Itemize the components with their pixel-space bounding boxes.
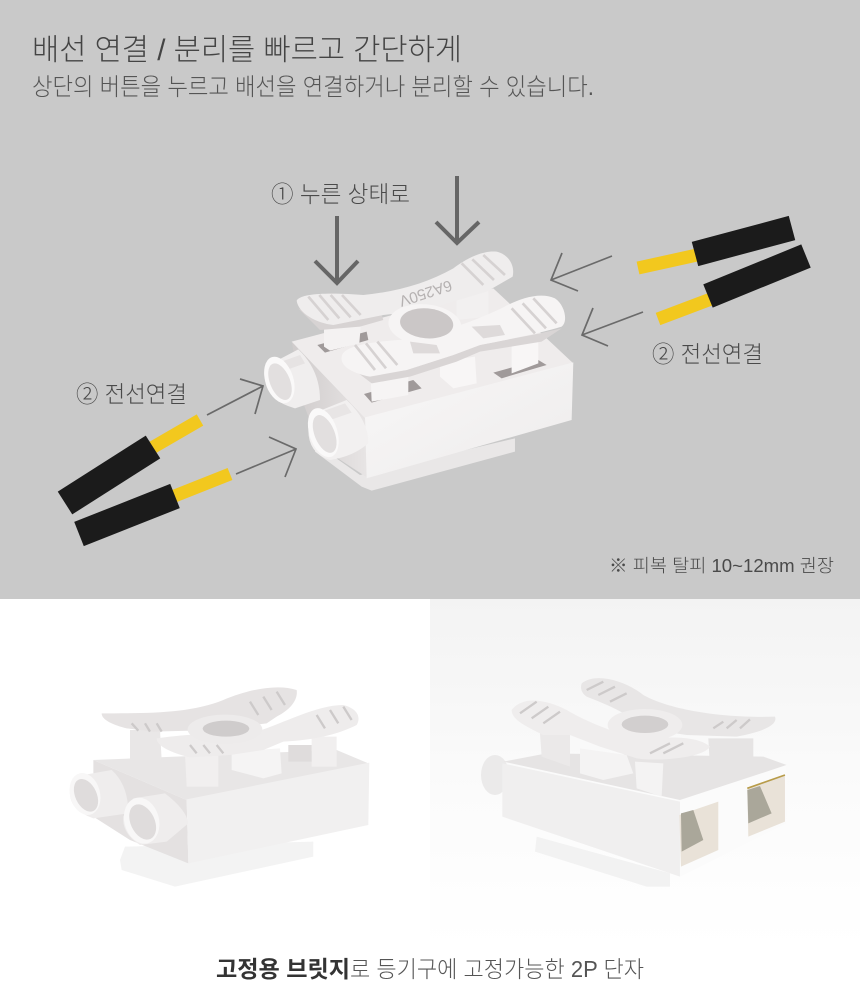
ribs	[132, 692, 352, 753]
front button underside	[343, 328, 562, 383]
front button bar	[157, 705, 359, 757]
photo: connector on grey, pressed state	[259, 251, 573, 491]
terminal opening right	[747, 775, 785, 837]
back button underside	[298, 308, 383, 330]
tube lower	[302, 400, 368, 461]
tube stub	[481, 755, 509, 795]
arrow: press down left	[315, 216, 358, 283]
front face	[365, 362, 573, 478]
wire: right lower	[658, 256, 806, 319]
bottom bridge	[315, 438, 515, 491]
tube lower	[119, 793, 188, 848]
front face	[502, 763, 680, 877]
arrow: right lower wire direction	[582, 308, 643, 346]
left side	[292, 342, 368, 478]
ribs	[308, 255, 557, 370]
wire: right upper	[638, 228, 792, 268]
photo: connector front-left view	[65, 687, 369, 887]
top face	[503, 753, 787, 800]
center ring	[387, 301, 463, 349]
arrow: right upper wire direction	[551, 253, 612, 291]
title: 배선 연결 / 분리를 빠르고 간단하게	[32, 34, 462, 67]
center ring	[608, 709, 682, 741]
embossed rating text: 6A250V	[396, 276, 454, 309]
bottom bridge	[120, 842, 313, 887]
panel: light bottom-right photo	[430, 599, 860, 949]
terminal opening left	[679, 802, 718, 867]
caption bold part: 고정용 브릿지	[216, 956, 350, 982]
label: wire connection right: ② 전선연결	[652, 341, 763, 367]
caption	[216, 956, 644, 982]
note: strip length: ※ 피복 탈피 10~12mm 권장	[609, 556, 834, 576]
slots	[317, 332, 547, 403]
label: wire connection left: ② 전선연결	[76, 381, 187, 407]
tube upper	[65, 770, 128, 818]
left side	[93, 760, 188, 863]
legs	[540, 733, 570, 767]
arrow: left lower wire direction	[236, 437, 296, 477]
front face	[187, 763, 369, 863]
embossed mark right	[472, 325, 505, 338]
embossed mark center	[410, 342, 440, 353]
bottom bridge	[535, 837, 670, 887]
tube upper	[259, 349, 320, 408]
center ring	[188, 715, 262, 744]
wire: left upper	[65, 420, 200, 503]
photo: connector front-right view	[481, 678, 787, 887]
arrow: press down right	[436, 176, 479, 243]
panel: white bottom-left photo	[0, 599, 430, 1005]
end face	[680, 765, 787, 877]
legs	[130, 730, 162, 760]
back button bar	[297, 251, 513, 325]
legs	[324, 327, 361, 351]
back button bar	[102, 687, 297, 732]
wire: left lower	[79, 474, 230, 534]
top face	[93, 750, 368, 800]
front button bar	[342, 296, 565, 377]
arrow: left upper wire direction	[207, 379, 263, 415]
panel: grey top section	[0, 0, 860, 599]
label: pressed state: ① 누른 상태로	[271, 181, 410, 207]
ribs	[520, 682, 750, 753]
top face	[292, 288, 573, 418]
back button bar	[581, 678, 775, 737]
subtitle: 상단의 버튼을 누르고 배선을 연결하거나 분리할 수 있습니다.	[32, 74, 594, 101]
front button bar	[512, 701, 710, 760]
caption regular part: 로 등기구에 고정가능한 2P 단자	[350, 956, 644, 982]
